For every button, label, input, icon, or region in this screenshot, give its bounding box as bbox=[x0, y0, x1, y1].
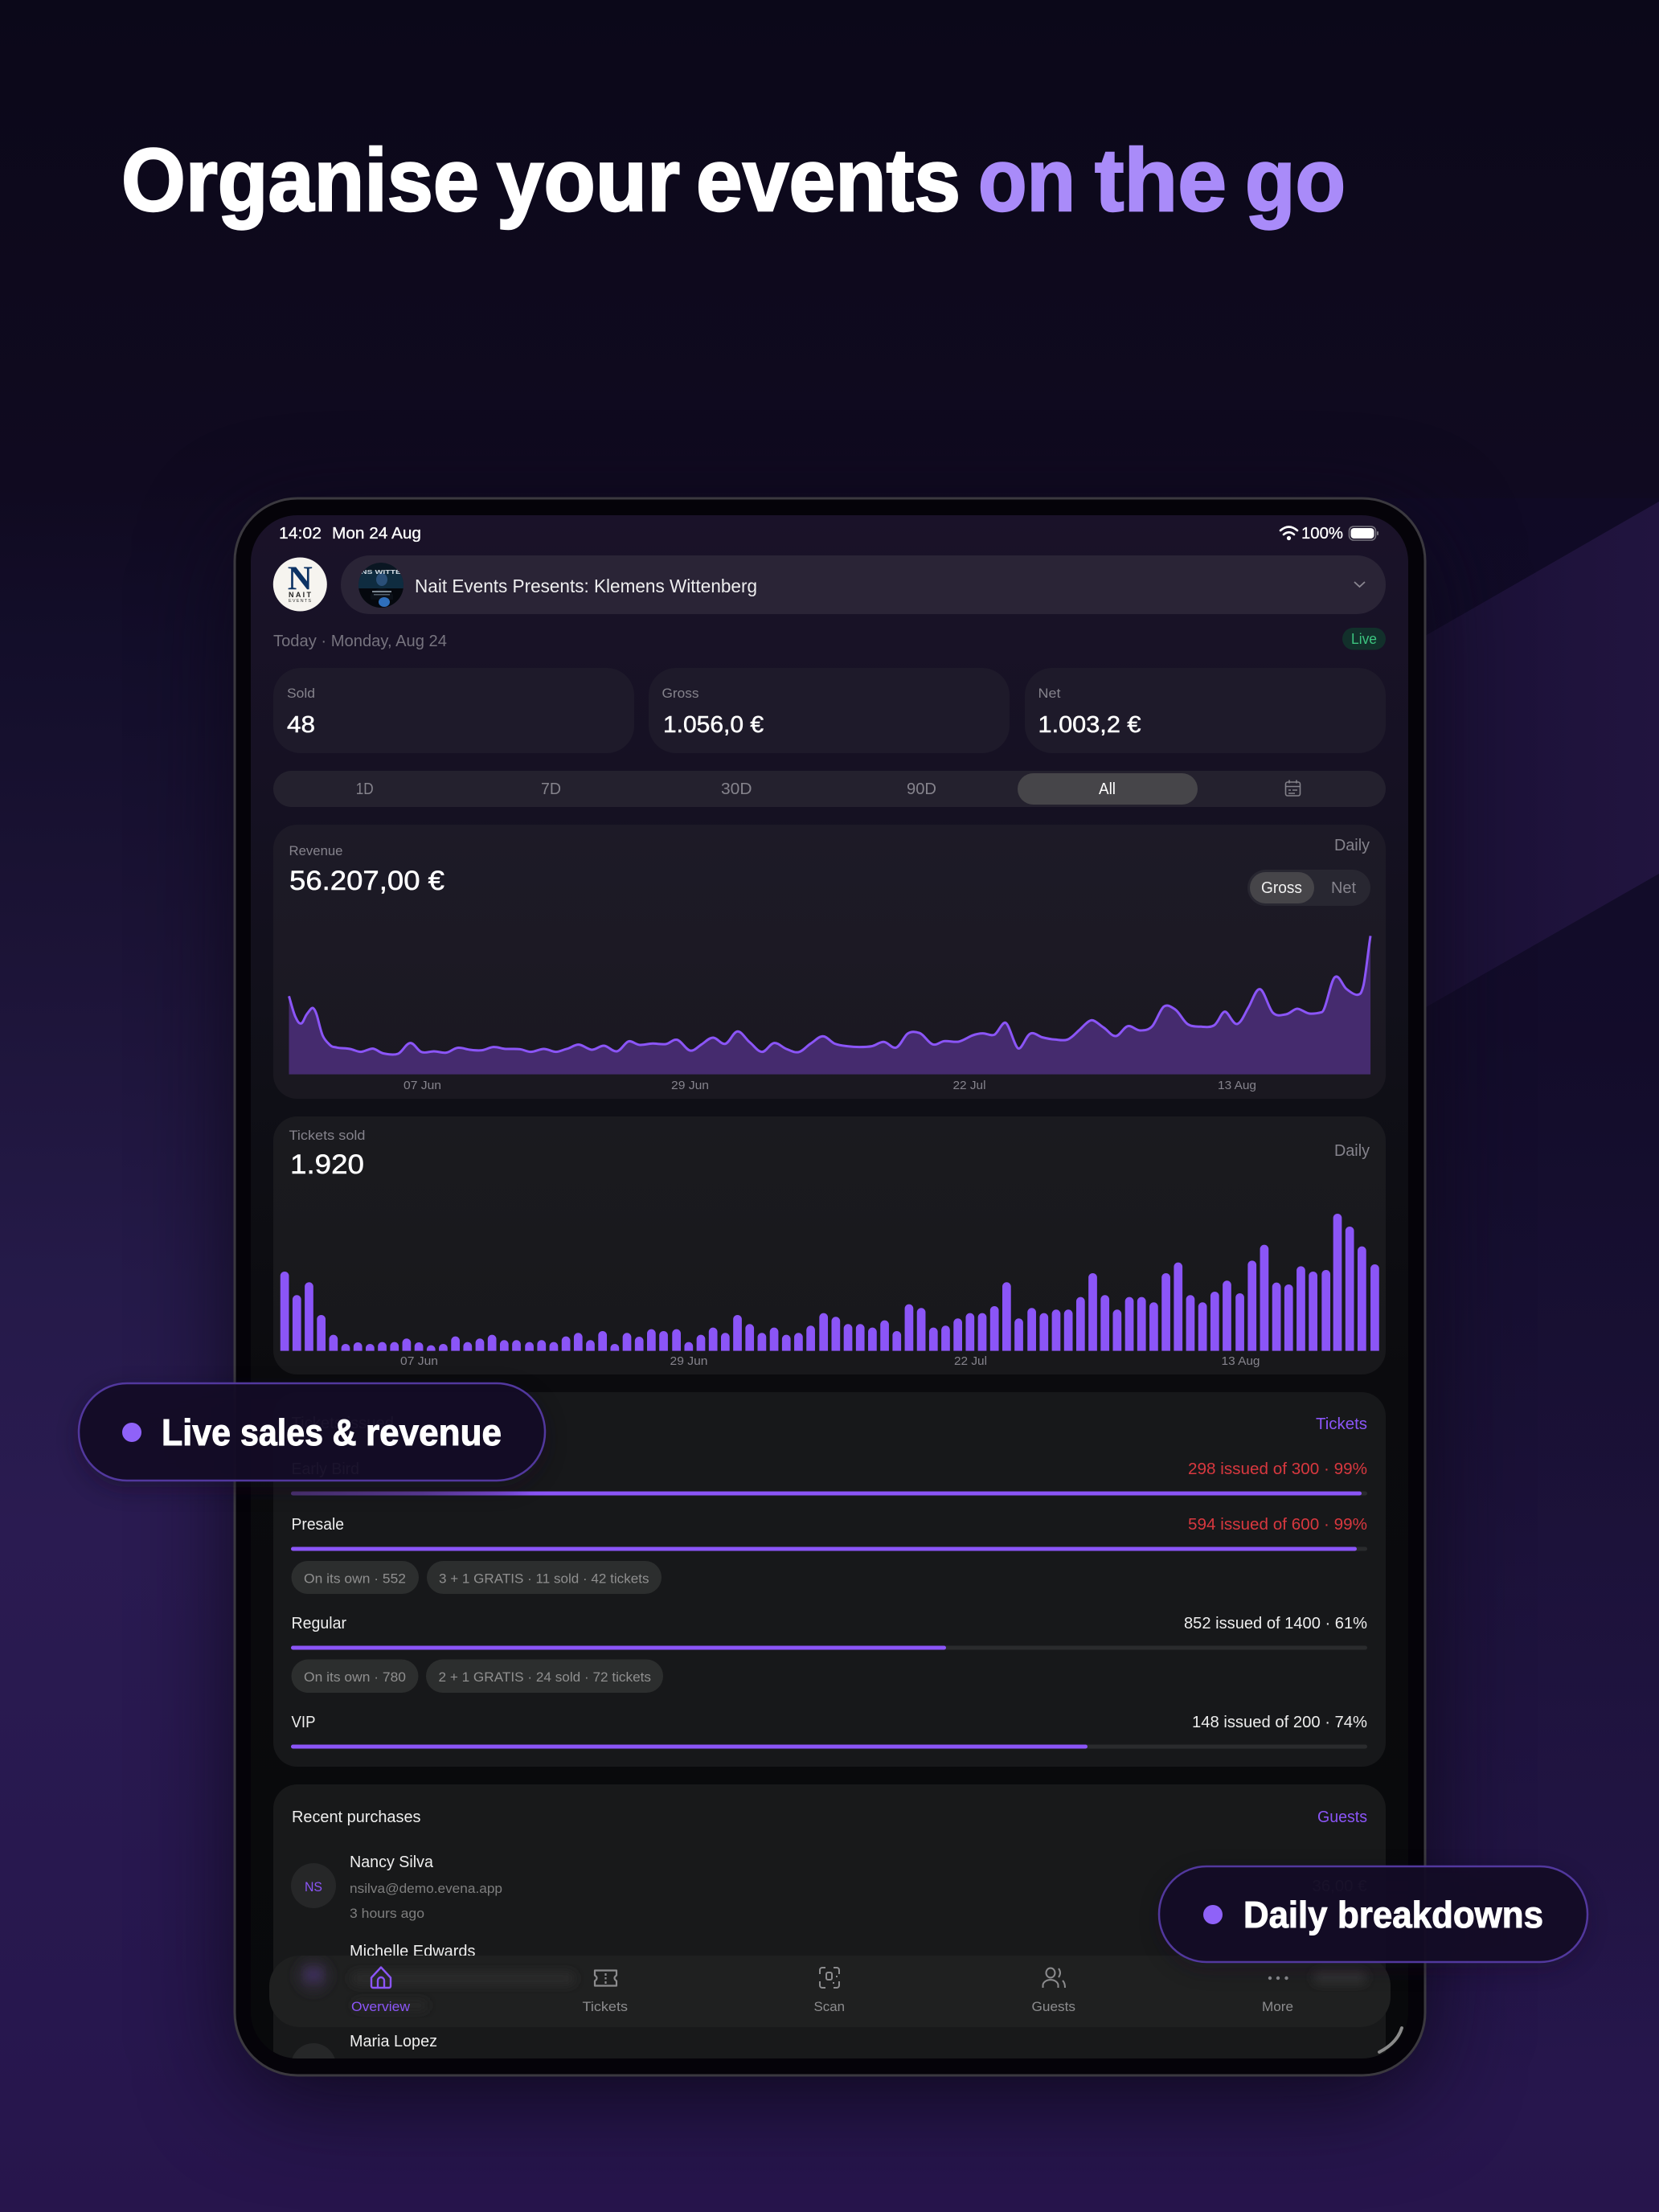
stat card: gross bbox=[649, 668, 1010, 753]
callout: live sales and revenue: sales bbox=[240, 1411, 323, 1453]
callout: live sales and revenue: revenue bbox=[366, 1411, 502, 1453]
right side background shade bbox=[1366, 498, 1659, 2106]
gross/net toggle: Net bbox=[1331, 879, 1356, 897]
recent purchases card bbox=[273, 1784, 1386, 2058]
ticket tiers card: Tickets bbox=[1316, 1415, 1367, 1433]
event selector bbox=[341, 555, 1386, 614]
icon: Nait Events logo: NAIT bbox=[289, 591, 312, 599]
status bar bbox=[279, 525, 1378, 543]
nav: overview bbox=[351, 1968, 411, 2014]
tier: regular: 852 issued of 1400 · 61% bbox=[1184, 1615, 1367, 1632]
purchase: Maria Lopez: Maria Lopez bbox=[350, 2033, 437, 2050]
stat card: sold: Sold bbox=[287, 686, 315, 701]
nav: overview: Overview bbox=[351, 1999, 411, 2014]
purchase: Nancy Silva: NS bbox=[305, 1879, 322, 1895]
title: Organise bbox=[121, 131, 479, 230]
revenue axis labels: 13 Aug bbox=[1218, 1079, 1256, 1092]
title: the bbox=[1095, 131, 1227, 230]
stat card: gross: Gross bbox=[662, 686, 699, 701]
date range tabs: 1D bbox=[356, 780, 374, 798]
tickets axis labels: 13 Aug bbox=[1222, 1354, 1260, 1368]
nav: more bbox=[1262, 1976, 1293, 2014]
purchase: Maria Lopez bbox=[293, 2034, 437, 2058]
nav: guests: Guests bbox=[1032, 1999, 1075, 2014]
tier: presale: Presale bbox=[291, 1516, 344, 1534]
icon: battery bbox=[1349, 526, 1378, 540]
tier: presale bbox=[291, 1516, 1367, 1594]
background diagonal band bbox=[1426, 502, 1659, 1002]
callout: daily breakdowns bbox=[1159, 1866, 1587, 1968]
date range tabs: 90D bbox=[907, 780, 936, 798]
stat card: sold: 48 bbox=[287, 712, 315, 738]
tier: presale: 3 + 1 GRATIS · 11 sold · 42 tickets bbox=[439, 1571, 649, 1587]
revenue axis labels: 22 Jul bbox=[953, 1079, 985, 1092]
callout: daily breakdowns: breakdowns bbox=[1337, 1894, 1543, 1936]
icon: Nait Events logo: EVENTS bbox=[289, 599, 311, 604]
area chart bbox=[289, 936, 1370, 1075]
tier: vip: 148 issued of 200 · 74% bbox=[1192, 1714, 1367, 1731]
recent purchases card: Guests bbox=[1317, 1809, 1367, 1826]
revenue axis labels bbox=[403, 1080, 1256, 1092]
device shadow bbox=[238, 502, 1422, 2072]
nav: more: More bbox=[1262, 1999, 1293, 2014]
device screen bbox=[251, 515, 1408, 2106]
status bar: 100% bbox=[1301, 525, 1343, 543]
stat card: gross: 1.056,0 € bbox=[663, 712, 764, 738]
live badge bbox=[1342, 628, 1386, 649]
icon: wifi bbox=[1280, 527, 1297, 539]
title: events bbox=[696, 131, 961, 230]
nav: guests bbox=[1032, 1968, 1075, 2014]
scroll indicator bbox=[1379, 2028, 1402, 2052]
icon: Nait Events logo bbox=[273, 558, 327, 611]
revenue axis labels: 07 Jun bbox=[403, 1079, 441, 1092]
date line: Today · Monday, Aug 24 bbox=[273, 633, 447, 650]
tier: regular: 2 + 1 GRATIS · 24 sold · 72 tickets bbox=[439, 1669, 651, 1685]
tier: early bird bbox=[291, 1460, 1367, 1495]
date range tabs: 7D bbox=[541, 780, 561, 798]
tier: presale: On its own · 552 bbox=[304, 1571, 406, 1587]
stat card: net bbox=[1025, 668, 1386, 753]
title: go bbox=[1245, 131, 1346, 230]
revenue card: Daily bbox=[1334, 837, 1370, 854]
stat card: net: Net bbox=[1038, 686, 1061, 701]
tickets sold card: Daily bbox=[1334, 1142, 1370, 1160]
purchase: Nancy Silva: 3 hours ago bbox=[350, 1906, 424, 1921]
tier: regular: Regular bbox=[291, 1615, 346, 1632]
device frame bbox=[235, 498, 1425, 2075]
revenue card bbox=[273, 825, 1386, 1099]
revenue axis labels: 29 Jun bbox=[671, 1079, 709, 1092]
nav: scan: Scan bbox=[813, 1999, 845, 2014]
callout: live sales and revenue: Live bbox=[162, 1411, 231, 1453]
purchase: Nancy Silva bbox=[291, 1855, 502, 1921]
stat card: net: 1.003,2 € bbox=[1038, 712, 1141, 738]
ticket tiers card: Tickets issued bbox=[291, 1415, 394, 1432]
status bar: 14:02 bbox=[279, 525, 322, 543]
blurred content behind nav bbox=[296, 1958, 1366, 2011]
tier: early bird: 298 issued of 300 · 99% bbox=[1188, 1460, 1367, 1478]
date range tabs: 30D bbox=[721, 780, 752, 798]
tickets sold card: 1.920 bbox=[290, 1149, 364, 1180]
bottom navigation bar bbox=[269, 1956, 1391, 2017]
date range tabs: All bbox=[1099, 780, 1116, 798]
purchase: Nancy Silva: Nancy Silva bbox=[350, 1854, 434, 1871]
tickets sold card bbox=[273, 1116, 1386, 1374]
live badge: Live bbox=[1351, 631, 1377, 647]
tickets axis labels: 07 Jun bbox=[400, 1354, 438, 1368]
tier: regular: On its own · 780 bbox=[304, 1669, 406, 1685]
gross/net toggle: Gross bbox=[1261, 879, 1302, 897]
icon: calendar bbox=[1286, 780, 1301, 796]
icon: event poster bbox=[358, 563, 403, 608]
icon: event poster: NS WITTE bbox=[361, 570, 401, 576]
tickets axis labels: 29 Jun bbox=[670, 1354, 707, 1368]
purchase: Michelle Edwards: Michelle Edwards bbox=[350, 1943, 476, 1960]
icon: chevron bbox=[1354, 582, 1365, 587]
title bbox=[121, 131, 1346, 230]
tier: presale: 594 issued of 600 · 99% bbox=[1188, 1516, 1367, 1534]
tier: vip: VIP bbox=[291, 1714, 315, 1731]
nav: tickets: Tickets bbox=[582, 1999, 628, 2014]
callout: live sales and revenue: & bbox=[333, 1411, 357, 1453]
tier: early bird: Early Bird bbox=[291, 1460, 359, 1478]
title: on bbox=[978, 131, 1075, 230]
tickets axis labels bbox=[400, 1356, 1259, 1367]
nav: scan bbox=[813, 1968, 845, 2014]
tickets axis labels: 22 Jul bbox=[954, 1354, 987, 1368]
bar chart bbox=[280, 1214, 1379, 1351]
nav: tickets bbox=[582, 1971, 628, 2014]
tier: vip bbox=[291, 1714, 1367, 1749]
revenue card: Revenue bbox=[289, 844, 342, 858]
stat card: sold bbox=[273, 668, 634, 753]
recent purchases card: Recent purchases bbox=[292, 1809, 421, 1826]
purchase: Nancy Silva: nsilva@demo.evena.app bbox=[350, 1881, 502, 1896]
date range tabs bbox=[273, 771, 1386, 807]
tablet device bbox=[235, 498, 1425, 2106]
revenue card: 56.207,00 € bbox=[289, 866, 444, 896]
icon: Nait Events logo: N bbox=[288, 561, 313, 598]
gross/net toggle bbox=[1247, 870, 1370, 906]
title: your bbox=[497, 131, 680, 230]
tickets sold card: Tickets sold bbox=[289, 1129, 365, 1143]
status bar: Mon 24 Aug bbox=[332, 525, 421, 543]
callout: daily breakdowns: Daily bbox=[1243, 1894, 1328, 1936]
callout: live sales and revenue bbox=[79, 1383, 545, 1487]
tier: regular bbox=[291, 1615, 1367, 1693]
purchase: Nancy Silva: 36,00 € bbox=[1312, 1878, 1366, 1895]
event selector: Nait Events Presents: Klemens Wittenberg bbox=[415, 576, 757, 596]
ticket tiers card bbox=[273, 1392, 1386, 1767]
